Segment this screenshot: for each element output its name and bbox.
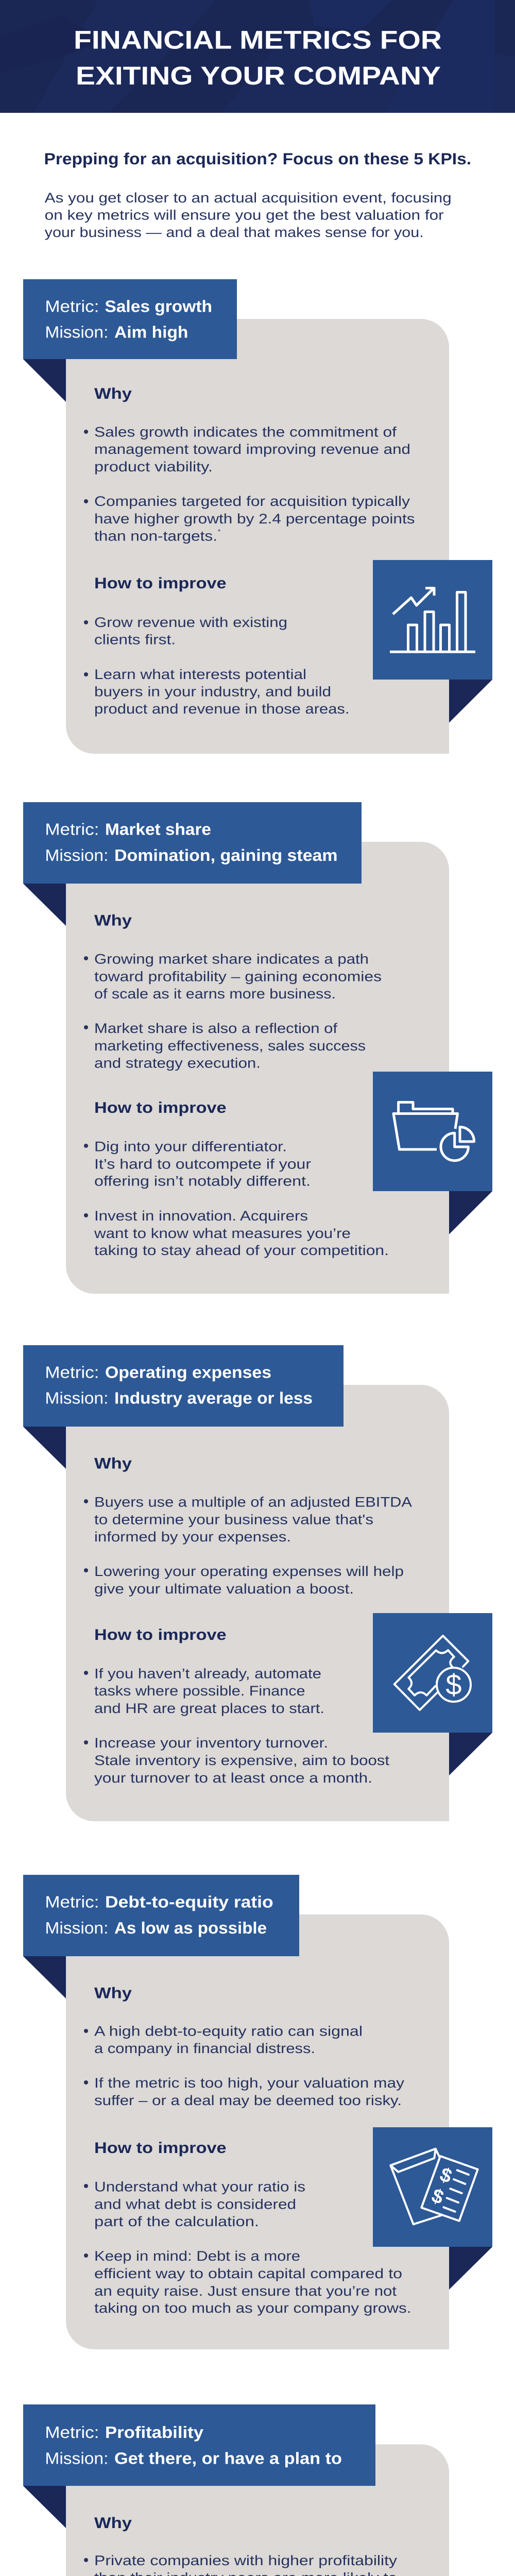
gray card [66,1385,449,1821]
improve bullets: and what debt is considered [94,2197,296,2212]
improve bullets: clients first. [94,632,176,647]
tab fold [23,1427,66,1469]
improve bullets: offering isn’t notably different. [94,1174,311,1189]
intro heading: Prepping for an acquisition? Focus on these 5 KPIs. [44,149,471,168]
metric tab: Metric: [45,1363,99,1382]
why bullets: If the metric is too high, your valuation may [94,2075,405,2091]
why bullets: have higher growth by 2.4 percentage points [94,511,415,527]
how to improve heading: How to improve [94,2140,227,2157]
title: FINANCIAL METRICS FOR [74,26,442,55]
icon: banknote and dollar coin [373,1613,492,1733]
panel: operating expenses [23,1345,492,1821]
metric tab: Profitability [105,2423,203,2442]
why heading: Why [94,912,132,929]
metric tab: Mission: [45,1388,108,1407]
metric tab: Mission: [45,1919,108,1937]
why bullets: a company in financial distress. [94,2041,315,2056]
why bullets [84,1495,412,1597]
why bullets: informed by your expenses. [94,1529,291,1545]
icon: folder and pie chart [373,1072,492,1191]
panel: profitability [23,2404,492,2576]
metric tab: Debt-to-equity ratio [105,1893,273,1911]
tab fold [23,2486,66,2528]
metric tab [23,1345,344,1427]
metric tab: Industry average or less [114,1388,313,1407]
why bullets: Sales growth indicates the commitment of [94,424,397,439]
intro paragraph: As you get closer to an actual acquisition event, focusing [45,190,452,206]
improve bullets: an equity raise. Just ensure that you’re not [94,2283,397,2299]
improve bullets: If you haven’t already, automate [94,1666,321,1682]
improve bullets: Learn what interests potential [94,667,306,682]
improve bullets: Understand what your ratio is [94,2179,305,2195]
metric tab [23,279,237,359]
improve bullets: Keep in mind: Debt is a more [94,2248,300,2264]
how to improve heading: How to improve [94,575,227,592]
metric tab: Metric: [45,1893,99,1911]
metric tab: Domination, gaining steam [114,846,338,865]
icon fold [449,1733,492,1775]
why bullets [84,2023,405,2108]
why bullets: to determine your business value that's [94,1512,373,1527]
why bullets: than non-targets. [94,529,217,544]
improve bullets [84,615,349,717]
improve bullets: product and revenue in those areas. [94,701,349,717]
tab fold [23,1956,66,1998]
gray card [66,1914,449,2349]
tab fold [23,884,66,926]
icon fold [449,1191,492,1234]
how to improve heading: How to improve [94,1099,227,1116]
improve bullets: Increase your inventory turnover. [94,1735,328,1751]
why bullets [84,952,382,1071]
icon fold [449,2247,492,2290]
metric tab: Metric: [45,297,99,316]
panel: debt-to-equity ratio [23,1875,492,2349]
gray card [66,319,449,754]
why bullets: Growing market share indicates a path [94,952,369,967]
metric tab: Get there, or have a plan to [114,2449,342,2468]
icon: envelope and invoice: $ [437,2164,455,2188]
icon: envelope and invoice: $ [429,2185,447,2209]
panel: sales growth [23,279,492,754]
metric tab: Sales growth [105,297,212,316]
improve bullets: tasks where possible. Finance [94,1683,305,1699]
improve bullets: Invest in innovation. Acquirers [94,1208,308,1224]
why bullets [84,2553,427,2576]
why bullets: suffer – or a deal may be deemed too risky. [94,2093,402,2108]
improve bullets: Grow revenue with existing [94,615,287,630]
gray card [66,2444,449,2576]
why heading: Why [94,1985,132,2002]
metric tab: Aim high [114,323,188,342]
metric tab: Mission: [45,846,108,865]
why bullets: management toward improving revenue and [94,442,410,457]
intro paragraph: your business — and a deal that makes sense for you. [45,225,424,240]
why bullets: Market share is also a reflection of [94,1021,338,1036]
why heading: Why [94,2515,132,2532]
improve bullets [84,2179,411,2316]
why bullets: toward profitability – gaining economies [94,969,382,984]
why bullets: and strategy execution. [94,1056,261,1071]
why heading: Why [94,385,132,402]
why bullets: Buyers use a multiple of an adjusted EBITDA [94,1495,412,1510]
improve bullets: part of the calculation. [94,2214,259,2229]
why bullets: Companies targeted for acquisition typically [94,494,410,509]
improve bullets: your turnover to at least once a month. [94,1770,372,1786]
why bullets: A high debt-to-equity ratio can signal [94,2023,363,2039]
improve bullets: buyers in your industry, and build [94,684,331,700]
icon: growth chart [373,560,492,680]
panel: market share [23,802,492,1294]
metric tab: Mission: [45,323,108,342]
icon: banknote and dollar coin: $ [445,1668,462,1701]
intro paragraph [45,190,452,240]
improve bullets: It’s hard to outcompete if your [94,1156,311,1172]
tab fold [23,359,66,402]
why bullets: product viability. [94,459,213,474]
gray card [66,842,449,1294]
metric tab: As low as possible [114,1919,267,1937]
why heading: Why [94,1455,132,1472]
header banner [0,0,515,113]
metric tab: Operating expenses [105,1363,271,1382]
metric tab: Metric: [45,2423,99,2442]
why bullets: of scale as it earns more business. [94,986,336,1002]
why bullets: give your ultimate valuation a boost. [94,1581,354,1597]
intro paragraph: on key metrics will ensure you get the best valuation for [45,207,444,223]
improve bullets: Dig into your differentiator. [94,1139,287,1155]
metric tab [23,2404,375,2486]
title [74,26,442,90]
improve bullets: taking on too much as your company grows. [94,2300,411,2316]
metric tab: Metric: [45,820,99,839]
improve bullets [84,1666,390,1786]
improve bullets: taking to stay ahead of your competition. [94,1243,389,1258]
why bullets: Private companies with higher profitability [94,2553,398,2568]
metric tab: Mission: [45,2449,108,2468]
metric tab [23,1875,299,1956]
improve bullets: Stale inventory is expensive, aim to boost [94,1753,390,1768]
why bullets [84,424,415,544]
why bullets: marketing effectiveness, sales success [94,1038,366,1054]
metric tab [23,802,362,884]
how to improve heading: How to improve [94,1626,227,1643]
title: EXITING YOUR COMPANY [76,61,441,90]
icon fold [449,680,492,723]
metric tab: Market share [105,820,211,839]
improve bullets [84,1139,389,1258]
icon: envelope and invoice [373,2127,492,2247]
why bullets: Lowering your operating expenses will help [94,1564,404,1579]
improve bullets: and HR are great places to start. [94,1701,324,1716]
why bullets: * [218,528,220,535]
improve bullets: want to know what measures you’re [94,1226,351,1241]
improve bullets: efficient way to obtain capital compared to [94,2266,402,2281]
